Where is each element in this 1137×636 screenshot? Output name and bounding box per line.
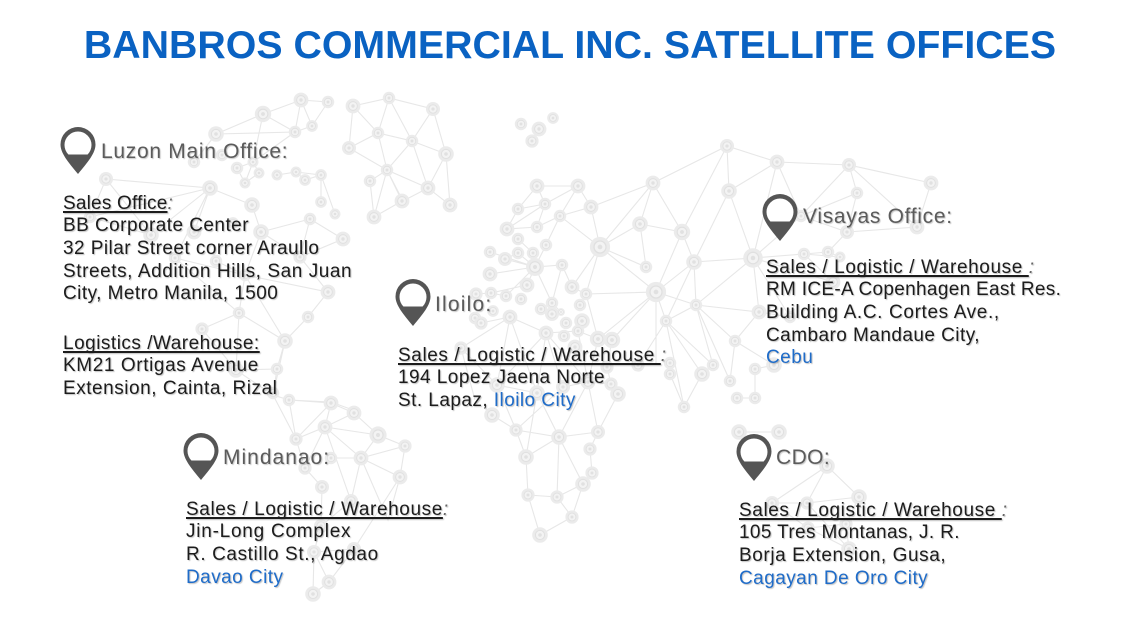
text: Iloilo address xyxy=(398,344,666,412)
text: Mindanao address xyxy=(186,498,449,588)
text: Luzon addresses: KM21 Ortigas Avenue xyxy=(63,355,259,376)
text: Visayas address: Sales / Logistic / Warehouse : xyxy=(766,256,1034,278)
text: Luzon addresses: 32 Pilar Street corner Araullo xyxy=(63,238,319,259)
panel: Luzon main office xyxy=(60,127,352,399)
text: Iloilo address: St. Lapaz, Iloilo City xyxy=(398,390,576,411)
text: Mindanao address: Jin-Long Complex xyxy=(186,521,351,542)
text: Mindanao address: R. Castillo St., Agdao xyxy=(186,544,379,565)
text: Iloilo address: Sales / Logistic / Warehouse : xyxy=(398,344,666,366)
text: CDO address: Sales / Logistic / Warehouse : xyxy=(739,500,1008,520)
heading: Mindanao: Mindanao: xyxy=(223,446,330,469)
text: CDO address: Borja Extension, Gusa, xyxy=(739,545,946,566)
heading: Iloilo: Iloilo: xyxy=(435,293,492,316)
text: Mindanao address: Davao City xyxy=(186,567,283,588)
panel: Iloilo office xyxy=(396,279,666,412)
text: Iloilo address: 194 Lopez Jaena Norte xyxy=(398,367,605,388)
title: BANBROS COMMERCIAL INC. SATELLITE OFFICES xyxy=(84,23,1056,67)
text: Luzon addresses: Streets, Addition Hills, San Juan xyxy=(63,261,352,282)
heading: CDO: CDO: xyxy=(776,446,830,469)
icon: Iloilo location pin xyxy=(396,279,430,326)
text: Luzon addresses: Logistics /Warehouse: xyxy=(63,333,260,354)
text: Visayas address xyxy=(766,256,1061,368)
icon: Mindanao location pin xyxy=(184,433,218,480)
text: Luzon addresses: Sales Office: xyxy=(63,192,173,214)
icon: Visayas location pin xyxy=(762,194,798,241)
text: Luzon addresses xyxy=(63,192,352,399)
heading: Luzon Main Office: Luzon Main Office: xyxy=(101,140,288,163)
text: CDO address: 105 Tres Montanas, J. R. xyxy=(739,522,960,543)
text: Visayas address: Building A.C. Cortes Ave., xyxy=(766,302,1000,323)
icon: CDO location pin xyxy=(736,434,772,481)
heading: Visayas Office: Visayas Office: xyxy=(803,205,953,228)
panel: Mindanao office xyxy=(184,433,449,588)
text: Mindanao address: Sales / Logistic / Warehouse: xyxy=(186,498,449,520)
panel: CDO office xyxy=(736,434,1008,590)
text: Luzon addresses: BB Corporate Center xyxy=(63,215,249,236)
text: Visayas address: RM ICE-A Copenhagen East Res. xyxy=(766,279,1061,300)
text: CDO address xyxy=(739,500,1008,590)
text: Visayas address: Cambaro Mandaue City, xyxy=(766,325,980,346)
icon: Luzon location pin xyxy=(60,127,96,174)
text: Visayas address: Cebu xyxy=(766,347,813,368)
text: Luzon addresses: Extension, Cainta, Rizal xyxy=(63,378,277,399)
text: Luzon addresses: City, Metro Manila, 1500 xyxy=(63,283,278,304)
text: CDO address: Cagayan De Oro City xyxy=(739,568,928,589)
panel: Visayas office xyxy=(762,194,1061,368)
